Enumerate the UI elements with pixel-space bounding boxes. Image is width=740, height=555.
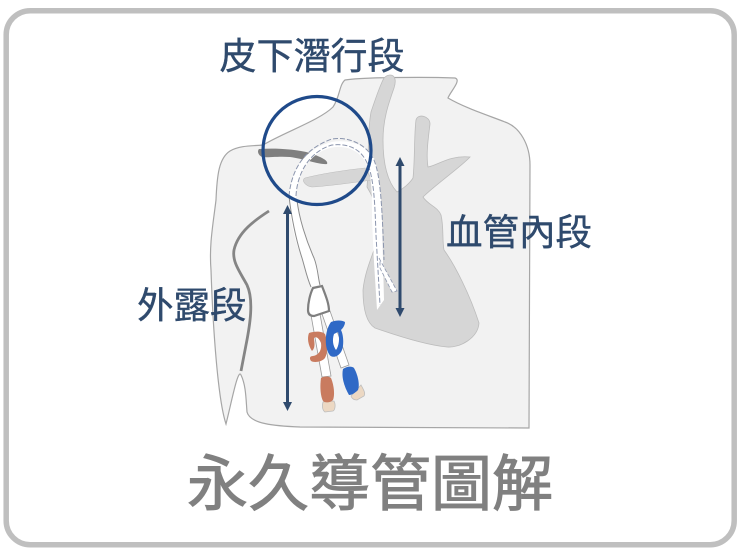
catheter hub (308, 286, 329, 316)
label: external segment: 外露段 (137, 285, 246, 326)
blue connector and cap (342, 367, 365, 400)
catheter lumens (311, 311, 349, 377)
arrow: external segment (283, 205, 292, 411)
label: tunneled segment: 皮下潛行段 (220, 36, 404, 77)
circle: tunneled segment highlight (263, 96, 371, 204)
catheter: tunneled and external segment (289, 138, 397, 377)
red connector and cap (320, 376, 335, 412)
armpit line (234, 211, 269, 371)
title: 永久導管圖解 (187, 450, 553, 518)
blue clamp (326, 320, 345, 357)
arrow: intravascular segment (396, 157, 404, 317)
red clamp (308, 332, 327, 362)
heart and great vessels (363, 75, 479, 347)
body silhouette (210, 77, 530, 428)
subclavian vein (303, 168, 372, 187)
clavicle bone (258, 149, 327, 164)
label: intravascular segment: 血管內段 (446, 212, 592, 253)
